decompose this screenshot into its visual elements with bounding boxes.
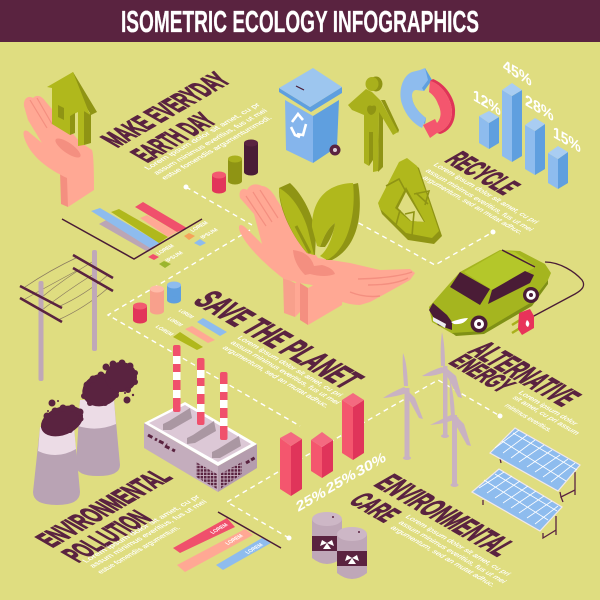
text block: save the planet: Lorem ipsum dolor sit amet, cu pri xyxy=(235,334,346,398)
chart: labelled strips xyxy=(153,309,227,350)
icon: circular arrows xyxy=(400,68,455,138)
chart: red bars with percentages xyxy=(280,393,388,515)
text block: earth day: assum minimus everitius, fus ut mei xyxy=(151,107,270,176)
heading: alternative energy: ENERGY xyxy=(443,350,522,396)
icon: recycle mark on bin xyxy=(291,114,306,137)
icon: cooling towers with smoke xyxy=(33,360,138,505)
chart: isometric bars xyxy=(62,202,220,268)
text block: earth day xyxy=(142,101,274,181)
chart: isometric bars: IPSUM xyxy=(165,251,185,263)
heading: recycle: RECYCLE xyxy=(438,148,526,199)
heading: environmental care: CARE xyxy=(342,489,407,527)
icon: house xyxy=(47,72,97,146)
icon: factory with chimneys xyxy=(144,345,257,492)
text block: recycle: argumentum, sed an mutat adhuc. xyxy=(420,174,526,236)
chart: red bars with percentages: 30% xyxy=(354,448,388,480)
text block: environmental pollution xyxy=(80,493,209,575)
text block: environmental pollution: Lorem ipsum dolor sit amet, cu pr xyxy=(80,493,203,564)
text block: environmental care: Lorem ipsum dolor sit amet, cu pri xyxy=(403,513,514,577)
icon: radioactive barrels xyxy=(312,512,367,579)
chart: red bars with percentages: 25% xyxy=(294,483,328,515)
chart: blue bars with percentages: 12% xyxy=(473,87,501,120)
chart: red bars with percentages: 25% xyxy=(324,465,358,497)
heading: make everyday earth day xyxy=(94,68,238,167)
heading: make everyday earth day: EARTH DAY xyxy=(124,109,224,167)
icon: electric car xyxy=(429,250,584,336)
chimneys xyxy=(173,345,228,440)
chart: labelled strips: LOREM xyxy=(165,317,183,328)
heading: save the planet: SAVE THE PLANET xyxy=(185,285,372,394)
text block: save the planet: assum minimus everitius, fus ut mei xyxy=(228,339,343,406)
icon: wind turbines xyxy=(383,332,471,487)
text block: environmental pollution: estue fomendiis argumentum. xyxy=(95,524,182,575)
text block: earth day: Lorem ipsum dolor sit amet, cu pr xyxy=(142,101,263,171)
text block: environmental care: argumentum, sed an mutat adhuc. xyxy=(388,524,498,588)
chart: isometric bars: IPSUM xyxy=(200,228,220,240)
chart: blue bars with percentages: 28% xyxy=(525,92,554,126)
chart: pollution bars: LOREM xyxy=(225,534,245,546)
heading: environmental pollution xyxy=(29,465,179,567)
icon: plug xyxy=(512,309,534,335)
heading: environmental pollution: ENVIRONMENTAL xyxy=(29,465,179,552)
icon: green person xyxy=(348,76,399,172)
heading: environmental care xyxy=(342,470,524,561)
chart: blue bars with percentages xyxy=(473,57,581,189)
text block: environmental care: assum minimus everitius, fus ut mei xyxy=(396,519,509,585)
heading: make everyday earth day: MAKE EVERYDAY xyxy=(94,68,238,152)
text block: alternative energy: sit amet, cu pri assum xyxy=(510,394,582,436)
chart: small cylinders xyxy=(133,282,181,324)
text block: alternative energy: minimus everitius. xyxy=(502,402,555,433)
text block: alternative energy: Lorem ipsum dolor xyxy=(516,389,581,427)
icon: leaves xyxy=(279,183,360,260)
heading: environmental pollution: POLLUTION xyxy=(55,506,159,567)
chart: pollution bars xyxy=(173,512,281,572)
chart: blue bars with percentages: 45% xyxy=(503,57,532,91)
smoke xyxy=(36,360,138,442)
chart: isometric bars: LOREM xyxy=(156,244,176,256)
icon: recycle triangle xyxy=(378,158,442,244)
text block: recycle: Lorem ipsum dolor sit amet, cu pri xyxy=(431,161,542,225)
text block: earth day: estue fomendiis argumentummodi. xyxy=(159,114,274,181)
icon: two hands holding leaves xyxy=(239,183,415,325)
chart: labelled strips: LOREM xyxy=(176,309,194,320)
text block: save the planet: argumentum, sed an mutat adhuc. xyxy=(220,344,332,409)
heading: alternative energy xyxy=(443,337,588,411)
icon: recycling bin xyxy=(279,68,342,163)
header band xyxy=(0,0,600,42)
icon: hand holding house xyxy=(24,72,97,207)
icon: power poles xyxy=(20,250,113,381)
chart: isometric bars: LOREM xyxy=(190,221,210,233)
chart: pollution bars: LOREM xyxy=(210,523,230,535)
chart: labelled strips: LOREM xyxy=(153,325,174,337)
chart: blue bars with percentages: 15% xyxy=(553,124,581,157)
text block: environmental pollution: assum minimus everitius, fus ut mei xyxy=(87,498,209,569)
icon: solar panels xyxy=(472,428,580,538)
chart: pollution bars: LOREM xyxy=(245,543,265,555)
chart: cylinders top xyxy=(212,140,258,194)
text block: recycle: assum minimus everitius, fus ut mei xyxy=(423,167,536,233)
dashed connectors xyxy=(108,184,502,540)
